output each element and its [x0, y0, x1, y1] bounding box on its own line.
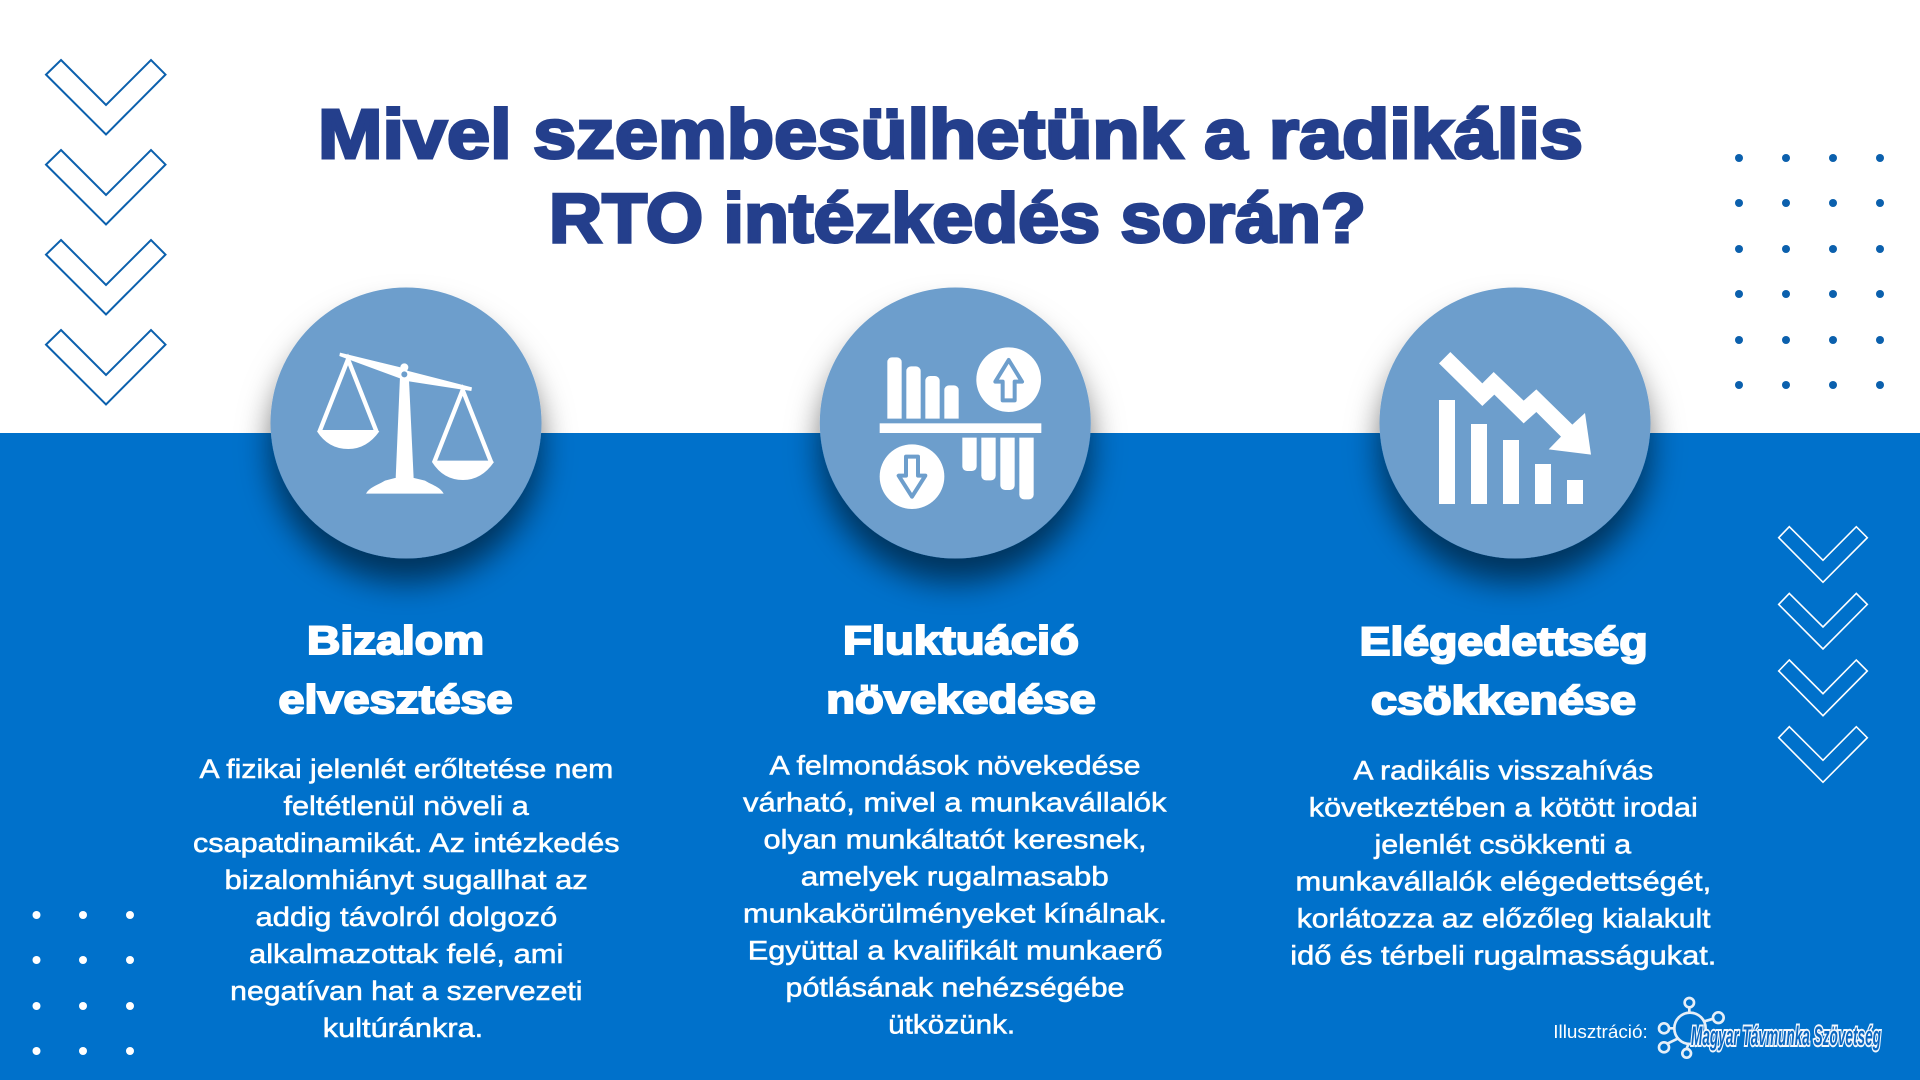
heading: Fluktuáció	[843, 619, 1079, 663]
body text: A radikális visszahívás	[1354, 756, 1653, 786]
body text: feltétlenül növeli a	[284, 791, 530, 821]
body text: pótlásának nehézségébe	[786, 973, 1124, 1003]
body text	[1290, 756, 1716, 971]
body text: kultúránkra.	[323, 1013, 483, 1043]
title: Mivel szembesülhetünk a radikális	[318, 95, 1583, 173]
body text: következtében a kötött irodai	[1309, 793, 1698, 823]
body text: addig távolról dolgozó	[256, 902, 557, 932]
body text: Együttal a kvalifikált munkaerő	[748, 936, 1162, 966]
body text: munkakörülményeket kínálnak.	[743, 899, 1167, 929]
heading	[1360, 620, 1648, 723]
dot grid bottom left	[32, 911, 134, 1055]
panel: Elégedettség csökkenése	[1290, 288, 1716, 971]
credit: illustration label and logo	[1553, 998, 1881, 1058]
heading	[826, 619, 1096, 722]
body text: munkavállalók elégedettségét,	[1296, 867, 1711, 897]
body text: negatívan hat a szervezeti	[230, 976, 582, 1006]
heading: Bizalom	[307, 619, 484, 663]
body text: alkalmazottak felé, ami	[249, 939, 563, 969]
icon circle	[270, 288, 542, 558]
body text	[743, 751, 1167, 1040]
body text: olyan munkáltatót keresnek,	[764, 825, 1146, 855]
title: RTO intézkedés során?	[549, 179, 1366, 257]
blue background band	[0, 433, 1920, 1080]
icon: declining bar chart with arrow	[1439, 352, 1591, 504]
heading: Elégedettség	[1360, 620, 1648, 664]
body text: idő és térbeli rugalmasságukat.	[1290, 941, 1716, 971]
body text: várható, mivel a munkavállalók	[743, 788, 1167, 818]
body text: amelyek rugalmasabb	[801, 862, 1109, 892]
illustration label: Illusztráció:	[1553, 1022, 1648, 1042]
body text: bizalomhiányt sugallhat az	[224, 865, 588, 895]
body text: ütközünk.	[888, 1010, 1015, 1040]
icon circle	[1380, 288, 1650, 558]
heading	[278, 619, 512, 722]
panel: Fluktuáció növekedése	[743, 288, 1167, 1040]
body text: csapatdinamikát. Az intézkedés	[193, 828, 620, 858]
title	[318, 95, 1583, 257]
panel: Bizalom elvesztése	[193, 288, 620, 1043]
dot grid top right	[1735, 154, 1884, 389]
chevrons top left	[46, 60, 166, 404]
body text: A fizikai jelenlét erőltetése nem	[200, 754, 613, 784]
heading: növekedése	[826, 678, 1096, 722]
body text: korlátozza az előzőleg kialakult	[1297, 904, 1711, 934]
body text	[193, 754, 620, 1043]
logo: Magyar Távmunka Szövetség	[1659, 998, 1881, 1058]
heading: elvesztése	[278, 678, 512, 722]
icon: bars with up and down arrows	[880, 347, 1041, 509]
heading: csökkenése	[1371, 679, 1636, 723]
body text: jelenlét csökkenti a	[1373, 830, 1632, 860]
chevrons right	[1779, 527, 1867, 782]
icon circle	[820, 288, 1091, 558]
body text: A felmondások növekedése	[770, 751, 1140, 781]
icon: balance scale	[317, 353, 494, 494]
